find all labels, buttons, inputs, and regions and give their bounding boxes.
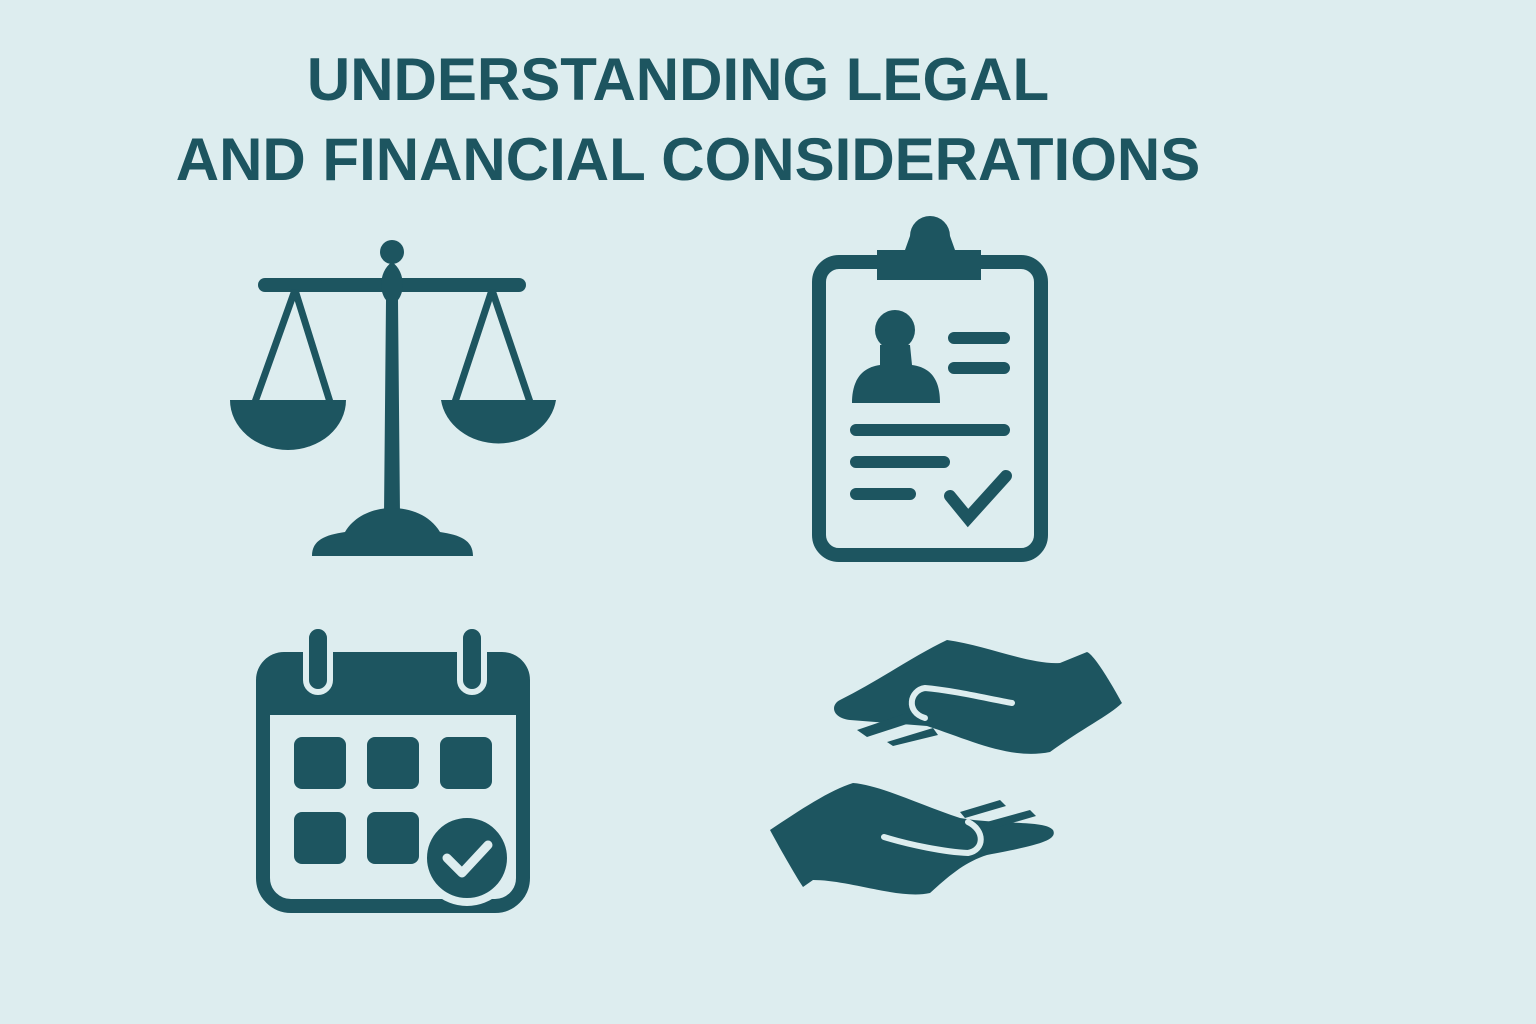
title: UNDERSTANDING LEGAL [307, 46, 1049, 113]
title [176, 46, 1200, 193]
icon: scales of justice [230, 240, 556, 556]
icon: clipboard with profile [819, 216, 1041, 555]
title: AND FINANCIAL CONSIDERATIONS [176, 126, 1200, 193]
icon: caring hands [770, 640, 1122, 894]
icon: calendar with check [256, 626, 530, 906]
